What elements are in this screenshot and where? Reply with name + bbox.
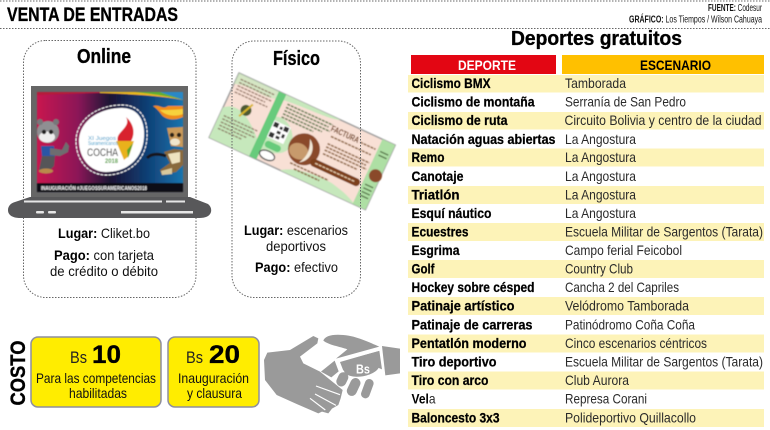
price card: Bs 20: Bs bbox=[186, 348, 203, 367]
title: venta de entradas: VENTA DE ENTRADAS bbox=[7, 5, 178, 26]
row: ciclismo de montaña: Serranía de San Pedro bbox=[565, 94, 686, 110]
row: tiro deportivo: Tiro deportivo bbox=[412, 354, 496, 370]
row: canotaje bbox=[412, 168, 636, 184]
text: fisico details: deportivos bbox=[266, 238, 326, 254]
text: fisico details bbox=[244, 222, 348, 275]
header: deporte bbox=[411, 55, 556, 74]
icon: laptop with games website: INAUGURACIÓN #JUEGOSSURAMERICANOS2018 bbox=[41, 184, 147, 192]
row: remo: Remo bbox=[412, 149, 444, 165]
icon: raccoon mascot bbox=[37, 119, 69, 174]
row: esqui nautico bbox=[412, 205, 636, 221]
header: escenario: ESCENARIO bbox=[640, 57, 711, 73]
row: esgrima: Campo ferial Feicobol bbox=[565, 242, 682, 258]
price card: Bs 10: Bs bbox=[70, 348, 87, 367]
row: hockey sobre cesped: Cancha 2 del Capriles bbox=[565, 279, 679, 295]
row: natacion aguas abiertas: Natación aguas abiertas bbox=[412, 131, 556, 147]
price card: Bs 10: 10 bbox=[92, 341, 121, 369]
row: patinaje de carreras: Patinódromo Coña Coña bbox=[565, 316, 695, 332]
ticket image bbox=[209, 73, 396, 210]
row: ciclismo de ruta: Ciclismo de ruta bbox=[412, 112, 508, 128]
icon: flame bbox=[153, 106, 183, 119]
row: patinaje de carreras bbox=[412, 316, 695, 332]
row: esqui nautico: La Angostura bbox=[565, 205, 636, 221]
text: online details: Pago: con tarjeta bbox=[54, 247, 154, 263]
price card: Bs 20: y clausura bbox=[187, 385, 242, 401]
row: golf: Golf bbox=[412, 260, 435, 276]
row: golf bbox=[408, 260, 764, 278]
row: pentatlon moderno: Pentatlón moderno bbox=[412, 335, 526, 351]
table: deportes gratuitos bbox=[408, 55, 764, 427]
header: escenario bbox=[562, 55, 764, 74]
row: triatlon: Triatlón bbox=[412, 186, 460, 202]
price card: Bs 10: Para las competencias bbox=[36, 370, 156, 386]
row: patinaje artistico: Velódromo Tamborada bbox=[565, 298, 689, 314]
icon: laptop with games website: 2018 bbox=[105, 158, 118, 165]
price card: Bs 10: habilitadas bbox=[69, 385, 127, 401]
row: baloncesto 3x3: Baloncesto 3x3 bbox=[412, 410, 500, 426]
text: fisico details: Lugar: escenarios bbox=[244, 222, 348, 238]
icon: hands exchanging money bbox=[264, 335, 400, 413]
panel: fisico bbox=[232, 41, 360, 298]
row: ciclismo BMX bbox=[408, 75, 764, 92]
row: pentatlon moderno: Cinco escenarios céntricos bbox=[565, 335, 707, 351]
row: ecuestres bbox=[408, 223, 764, 241]
row: ecuestres: Ecuestres bbox=[412, 224, 469, 240]
icon: laptop with games website: Suramericanos bbox=[88, 141, 118, 147]
heading: online: Online bbox=[77, 46, 131, 68]
row: tiro con arco: Tiro con arco bbox=[412, 372, 488, 388]
row: ciclismo de montaña: Ciclismo de montaña bbox=[412, 94, 535, 110]
row: ciclismo BMX: Tamborada bbox=[565, 75, 626, 91]
row: ciclismo de montaña bbox=[412, 94, 686, 110]
row: natacion aguas abiertas: La Angostura bbox=[565, 131, 636, 147]
row: golf: Country Club bbox=[565, 260, 633, 276]
text: online details: Lugar: Cliket.bo bbox=[58, 225, 150, 241]
source credits bbox=[629, 3, 762, 26]
row: hockey sobre cesped bbox=[412, 279, 679, 295]
icon: laptop with games website: XI Juegos bbox=[88, 136, 117, 142]
row: canotaje: Canotaje bbox=[412, 168, 464, 184]
icon: hands exchanging money: Bs bbox=[356, 361, 370, 376]
icon: laptop with games website: COCHA bbox=[87, 147, 119, 159]
row: tiro con arco bbox=[408, 372, 764, 390]
row: esgrima: Esgrima bbox=[412, 242, 460, 258]
text: online details: de crédito o débito bbox=[50, 263, 158, 279]
heading: fisico: Físico bbox=[273, 48, 320, 70]
row: vela: Vela bbox=[412, 390, 436, 406]
row: triatlon: La Angostura bbox=[565, 186, 636, 202]
row: triatlon bbox=[408, 186, 764, 204]
heading: deportes gratuitos: Deportes gratuitos bbox=[511, 28, 682, 50]
panel: online bbox=[8, 40, 211, 298]
icon: laptop with games website bbox=[8, 86, 211, 218]
row: patinaje artistico bbox=[408, 297, 764, 315]
row: hockey sobre cesped: Hockey sobre césped bbox=[412, 279, 534, 295]
row: tiro con arco: Club Aurora bbox=[565, 372, 629, 388]
text: fisico details: Pago: efectivo bbox=[255, 259, 338, 275]
row: ciclismo BMX: Ciclismo BMX bbox=[412, 75, 491, 91]
price card: Bs 10 bbox=[31, 337, 161, 407]
header: deporte: DEPORTE bbox=[458, 57, 516, 73]
row: pentatlon moderno bbox=[408, 334, 764, 352]
text: online details bbox=[50, 225, 158, 279]
row: baloncesto 3x3: Polideportivo Quillacollo bbox=[565, 410, 696, 426]
row: tiro deportivo bbox=[412, 354, 763, 370]
row: ciclismo de ruta bbox=[408, 112, 764, 130]
price card: Bs 20 bbox=[168, 337, 259, 407]
row: canotaje: La Angostura bbox=[565, 168, 636, 184]
row: vela: Represa Corani bbox=[565, 390, 647, 406]
price card: Bs 20: Inauguración bbox=[178, 370, 249, 386]
label: costo: COSTO bbox=[7, 340, 30, 406]
row: remo: La Angostura bbox=[565, 149, 636, 165]
row: patinaje de carreras: Patinaje de carreras bbox=[412, 316, 533, 332]
row: patinaje artistico: Patinaje artístico bbox=[412, 298, 514, 314]
row: esqui nautico: Esquí náutico bbox=[412, 205, 492, 221]
qr code bbox=[267, 120, 291, 144]
row: esgrima bbox=[412, 242, 682, 258]
icon: jaguar mascot bbox=[147, 127, 183, 175]
price card: Bs 20: 20 bbox=[209, 341, 240, 369]
row: baloncesto 3x3 bbox=[408, 409, 764, 427]
row: remo bbox=[408, 148, 764, 166]
ticket image: FACTURA bbox=[329, 123, 361, 145]
row: vela bbox=[412, 390, 647, 406]
